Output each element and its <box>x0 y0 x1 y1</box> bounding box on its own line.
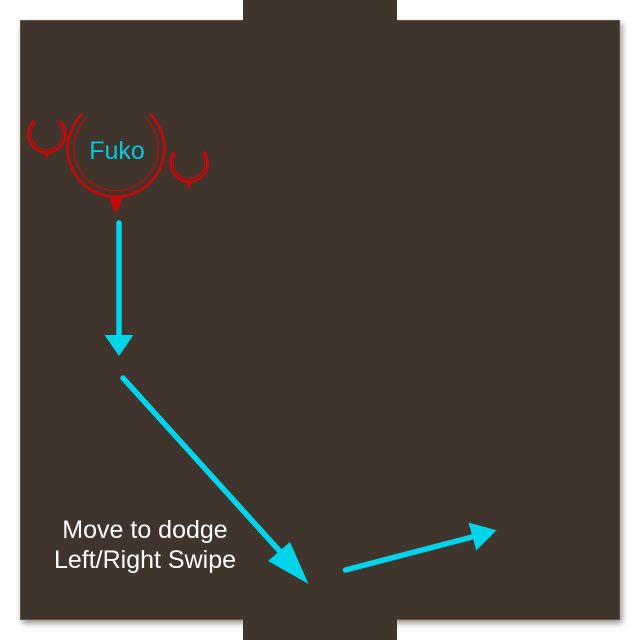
icon: small left ring <box>28 121 65 160</box>
icon: large ring spike <box>110 196 122 214</box>
instruction text: Move to dodge <box>62 516 228 544</box>
icon: large outer ring <box>68 114 164 197</box>
arrow: dodge to upper right <box>346 522 496 570</box>
instruction text: Left/Right Swipe <box>54 546 236 574</box>
arrow: straight down <box>104 223 134 356</box>
panel: vertical corridor <box>243 0 397 640</box>
label: Fuko: Fuko <box>89 137 145 165</box>
arrow: diagonal to lower right <box>123 378 308 584</box>
character: Fuko with red rings <box>68 114 164 214</box>
icon: large inner ring <box>74 119 158 191</box>
instruction text <box>54 516 236 574</box>
icon: small right ring <box>171 152 208 190</box>
